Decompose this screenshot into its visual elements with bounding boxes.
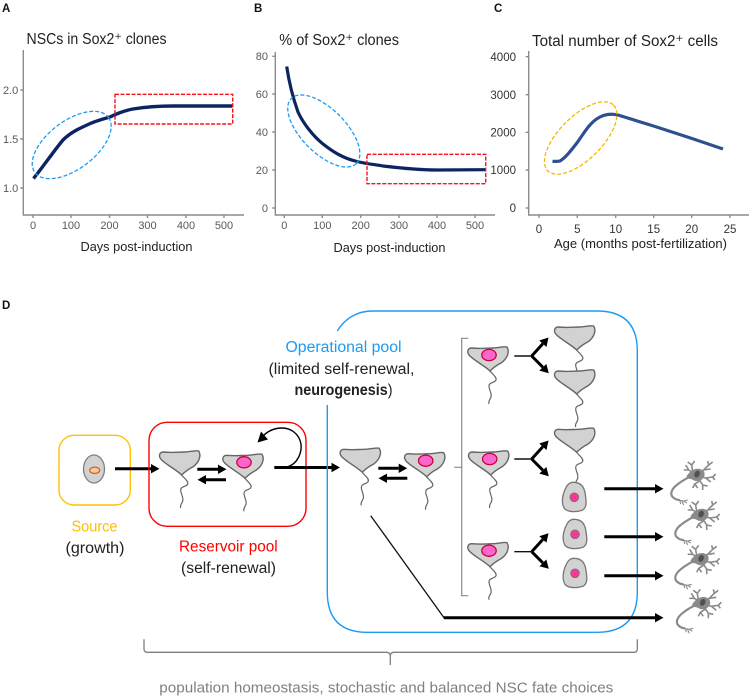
chart A x tick labels: 400	[177, 220, 195, 232]
source cell	[84, 455, 104, 483]
chart A x tick labels: 200	[100, 220, 119, 232]
source pool	[59, 435, 130, 557]
chart A y tick labels: 2.0	[3, 85, 18, 97]
reservoir label: Reservoir pool	[179, 539, 278, 556]
chart B y tick labels: 80	[256, 51, 268, 63]
chart C x tick labels: 0	[536, 224, 542, 236]
chart A x tick labels	[30, 220, 233, 232]
fate option: symmetric self-renewal	[468, 326, 595, 427]
chart A x tick labels: 0	[30, 220, 36, 232]
operational cell without marker	[340, 448, 380, 505]
operational label: Operational pool	[286, 339, 402, 356]
chart A y tick labels: 1.5	[3, 134, 18, 146]
chart A x tick labels: 500	[215, 220, 233, 232]
chart C y tick labels: 1000	[490, 165, 516, 177]
bottom brace	[144, 639, 637, 665]
chart A x tick labels: 100	[62, 220, 80, 232]
chart A curve	[34, 106, 232, 178]
chart B y tick labels: 60	[256, 89, 268, 101]
chart B x axis label: Days post-induction	[334, 240, 446, 255]
arrows between reservoir cells	[197, 469, 226, 480]
chart C y tick labels: 4000	[490, 52, 516, 64]
chart C y tick labels: 0	[510, 203, 516, 215]
neurogenesis label: neurogenesis)	[294, 382, 392, 399]
chart B x tick labels: 300	[390, 220, 408, 232]
chart C axes	[526, 51, 749, 218]
reservoir box	[149, 422, 306, 526]
panel letter D: D	[2, 300, 10, 312]
chart C x tick labels: 25	[724, 224, 736, 236]
source label: Source	[72, 518, 118, 536]
chart A title: NSCs in Sox2⁺ clones	[26, 31, 167, 48]
chart B y tick labels: 20	[256, 165, 268, 177]
source box	[59, 435, 130, 505]
panel letter A: A	[2, 3, 10, 15]
chart B x tick labels: 100	[313, 220, 331, 232]
chart C x tick labels: 20	[685, 224, 698, 236]
reservoir cell without marker	[160, 451, 200, 508]
arrow: source to reservoir	[115, 467, 151, 470]
chart B x tick labels: 500	[466, 220, 484, 232]
chart C x tick labels: 5	[574, 224, 581, 236]
chart C x tick labels	[536, 224, 736, 236]
chart C yellow dashed ellipse	[533, 90, 629, 186]
chart C y tick labels	[490, 52, 516, 215]
reservoir cell with nucleus	[223, 454, 263, 511]
chart B red dashed box	[367, 154, 486, 184]
choice bracket	[454, 338, 468, 596]
chart B curve	[287, 66, 485, 170]
chart A y tick labels: 1.0	[3, 183, 18, 195]
self-renewal label: (self-renewal)	[181, 560, 276, 577]
chart C curve	[552, 114, 723, 161]
chart C x tick labels: 10	[609, 224, 622, 236]
operational cell with nucleus	[405, 452, 445, 510]
chart B y tick labels: 0	[262, 203, 268, 215]
neurons	[671, 461, 721, 633]
panel letter B: B	[254, 3, 262, 15]
chart C x axis label: Age (months post-fertilization)	[554, 236, 727, 251]
chart B x tick labels: 200	[352, 220, 370, 232]
arrows to neurons	[371, 489, 655, 618]
chart B x tick labels: 0	[281, 220, 287, 232]
panel letter C: C	[494, 3, 502, 15]
panel: chart A	[3, 31, 244, 254]
bottom caption: population homeostasis, stochastic and balanced NSC fate choices	[159, 679, 613, 696]
reservoir pool	[149, 422, 306, 577]
chart B blue dashed ellipse	[276, 83, 372, 179]
limited self-renewal label: (limited self-renewal,	[268, 361, 414, 378]
chart C title: Total number of Sox2⁺ cells	[532, 33, 718, 50]
chart C x tick labels: 15	[647, 224, 660, 236]
chart B axes	[272, 52, 495, 218]
fate option: asymmetric division	[469, 428, 595, 512]
chart B y tick labels: 40	[256, 127, 268, 139]
panel: chart B	[256, 32, 495, 255]
growth label: (growth)	[66, 540, 124, 557]
operational box	[327, 311, 637, 632]
self-renewal curved arrow	[258, 428, 301, 467]
chart A x axis label: Days post-induction	[80, 239, 192, 254]
chart A x tick labels: 300	[138, 220, 157, 232]
chart B title: % of Sox2⁺ clones	[279, 32, 399, 49]
panel: chart C	[490, 33, 749, 251]
chart A axes	[20, 50, 244, 218]
chart B x tick labels	[281, 220, 484, 232]
chart C y tick labels: 3000	[490, 90, 516, 102]
operational pool	[268, 311, 637, 632]
chart A red dashed box	[115, 94, 233, 124]
chart B x tick labels: 400	[428, 220, 446, 232]
fate option: symmetric differentiation	[468, 519, 587, 600]
panel: D schematic	[59, 311, 721, 696]
arrow: reservoir to operational	[274, 466, 332, 469]
arrows between operational cells	[378, 468, 407, 478]
chart A y tick labels	[3, 85, 18, 195]
chart C y tick labels: 2000	[490, 128, 516, 140]
chart A blue dashed ellipse	[21, 98, 123, 192]
chart B y tick labels	[256, 51, 268, 215]
